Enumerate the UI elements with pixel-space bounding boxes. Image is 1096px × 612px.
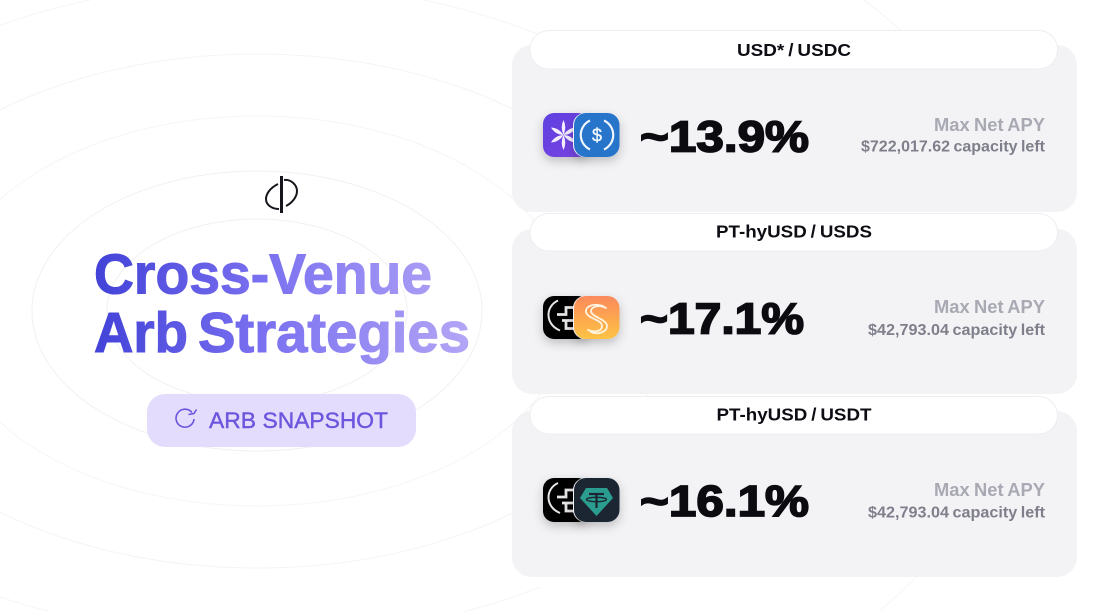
icon: hyUSD [543,478,589,522]
apy value: ~17.1% [640,296,804,344]
icon: refresh [176,409,196,427]
panel: PT-hyUSD / USDT [512,396,1077,577]
panel: PT-hyUSD / USDS [512,214,1077,394]
icon: USDT [573,478,620,522]
title [94,242,470,365]
icon: USDC [573,113,620,157]
icon: USDC: $ [592,126,602,146]
icon: hyUSD [543,296,589,339]
title: Strategies [198,301,470,365]
pill: pair name [530,30,1058,69]
pill: pair name: PT-hyUSD / USDT [716,404,872,424]
title: Cross-Venue [94,242,432,306]
apy value: ~16.1% [640,478,809,526]
pill: pair name [530,396,1058,434]
apy label: Max Net APY [934,115,1045,135]
pill: pair name: PT-hyUSD / USDS [716,222,872,242]
panel: USD* / USDC [512,30,1077,212]
icon: USDS [573,296,620,339]
apy label: Max Net APY [934,297,1045,317]
apy label: Max Net APY [934,480,1045,500]
apy value: ~13.9% [640,114,809,162]
pill: pair name: USD* / USDC [737,40,851,60]
capacity: $42,793.04 capacity left [868,322,1045,339]
capacity: $722,017.62 capacity left [861,138,1045,156]
logo [266,176,297,213]
badge text: ARB [209,408,256,433]
badge text [209,408,388,433]
badge: arb snapshot [147,394,416,447]
icon: star token [543,113,589,157]
pill: pair name [530,214,1058,251]
capacity: $42,793.04 capacity left [868,504,1045,522]
badge text: SNAPSHOT [262,408,388,433]
title: Arb [94,301,188,365]
